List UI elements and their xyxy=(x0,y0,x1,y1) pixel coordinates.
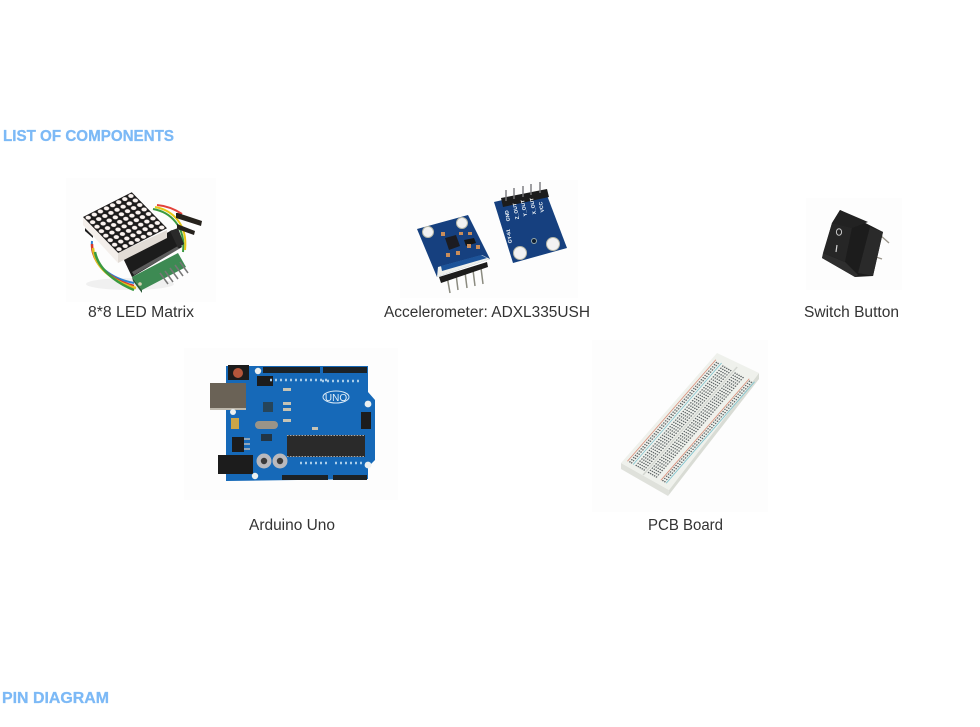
heading: pin diagram: PIN DIAGRAM xyxy=(2,690,109,707)
image: ADXL335 breakout boards: VCC xyxy=(538,201,546,213)
image: ADXL335 breakout boards: GY-61 xyxy=(506,228,514,244)
component: accelerometer xyxy=(384,180,590,321)
component: PCB board xyxy=(592,340,768,534)
image: LED matrix module xyxy=(66,178,216,302)
caption: PCB Board: PCB Board xyxy=(648,517,723,534)
image: ADXL335 breakout boards: X_OUT xyxy=(529,197,538,215)
image: rocker switch xyxy=(806,198,902,290)
component: switch button xyxy=(804,198,902,321)
caption: 8*8 LED Matrix: 8*8 LED Matrix xyxy=(88,304,194,321)
image: Arduino Uno board: UNO xyxy=(325,393,347,404)
right board xyxy=(494,190,567,263)
component: 8*8 LED matrix xyxy=(66,178,216,321)
caption: Accelerometer: Accelerometer: ADXL335USH xyxy=(384,304,590,321)
image: ADXL335 breakout boards: Y_OUT xyxy=(520,199,529,217)
image: solderless breadboard xyxy=(592,340,768,512)
image: ADXL335 breakout boards: GND xyxy=(504,209,512,222)
image: ADXL335 breakout boards xyxy=(400,180,578,298)
image: Arduino Uno board xyxy=(184,348,398,500)
component: Arduino Uno xyxy=(184,348,398,534)
image: ADXL335 breakout boards: Z_OUT xyxy=(512,203,521,220)
heading: list of components: LIST OF COMPONENTS xyxy=(3,128,174,145)
caption: Arduino Uno: Arduino Uno xyxy=(249,517,335,534)
left board xyxy=(447,268,483,293)
caption: Switch Button: Switch Button xyxy=(804,304,899,321)
